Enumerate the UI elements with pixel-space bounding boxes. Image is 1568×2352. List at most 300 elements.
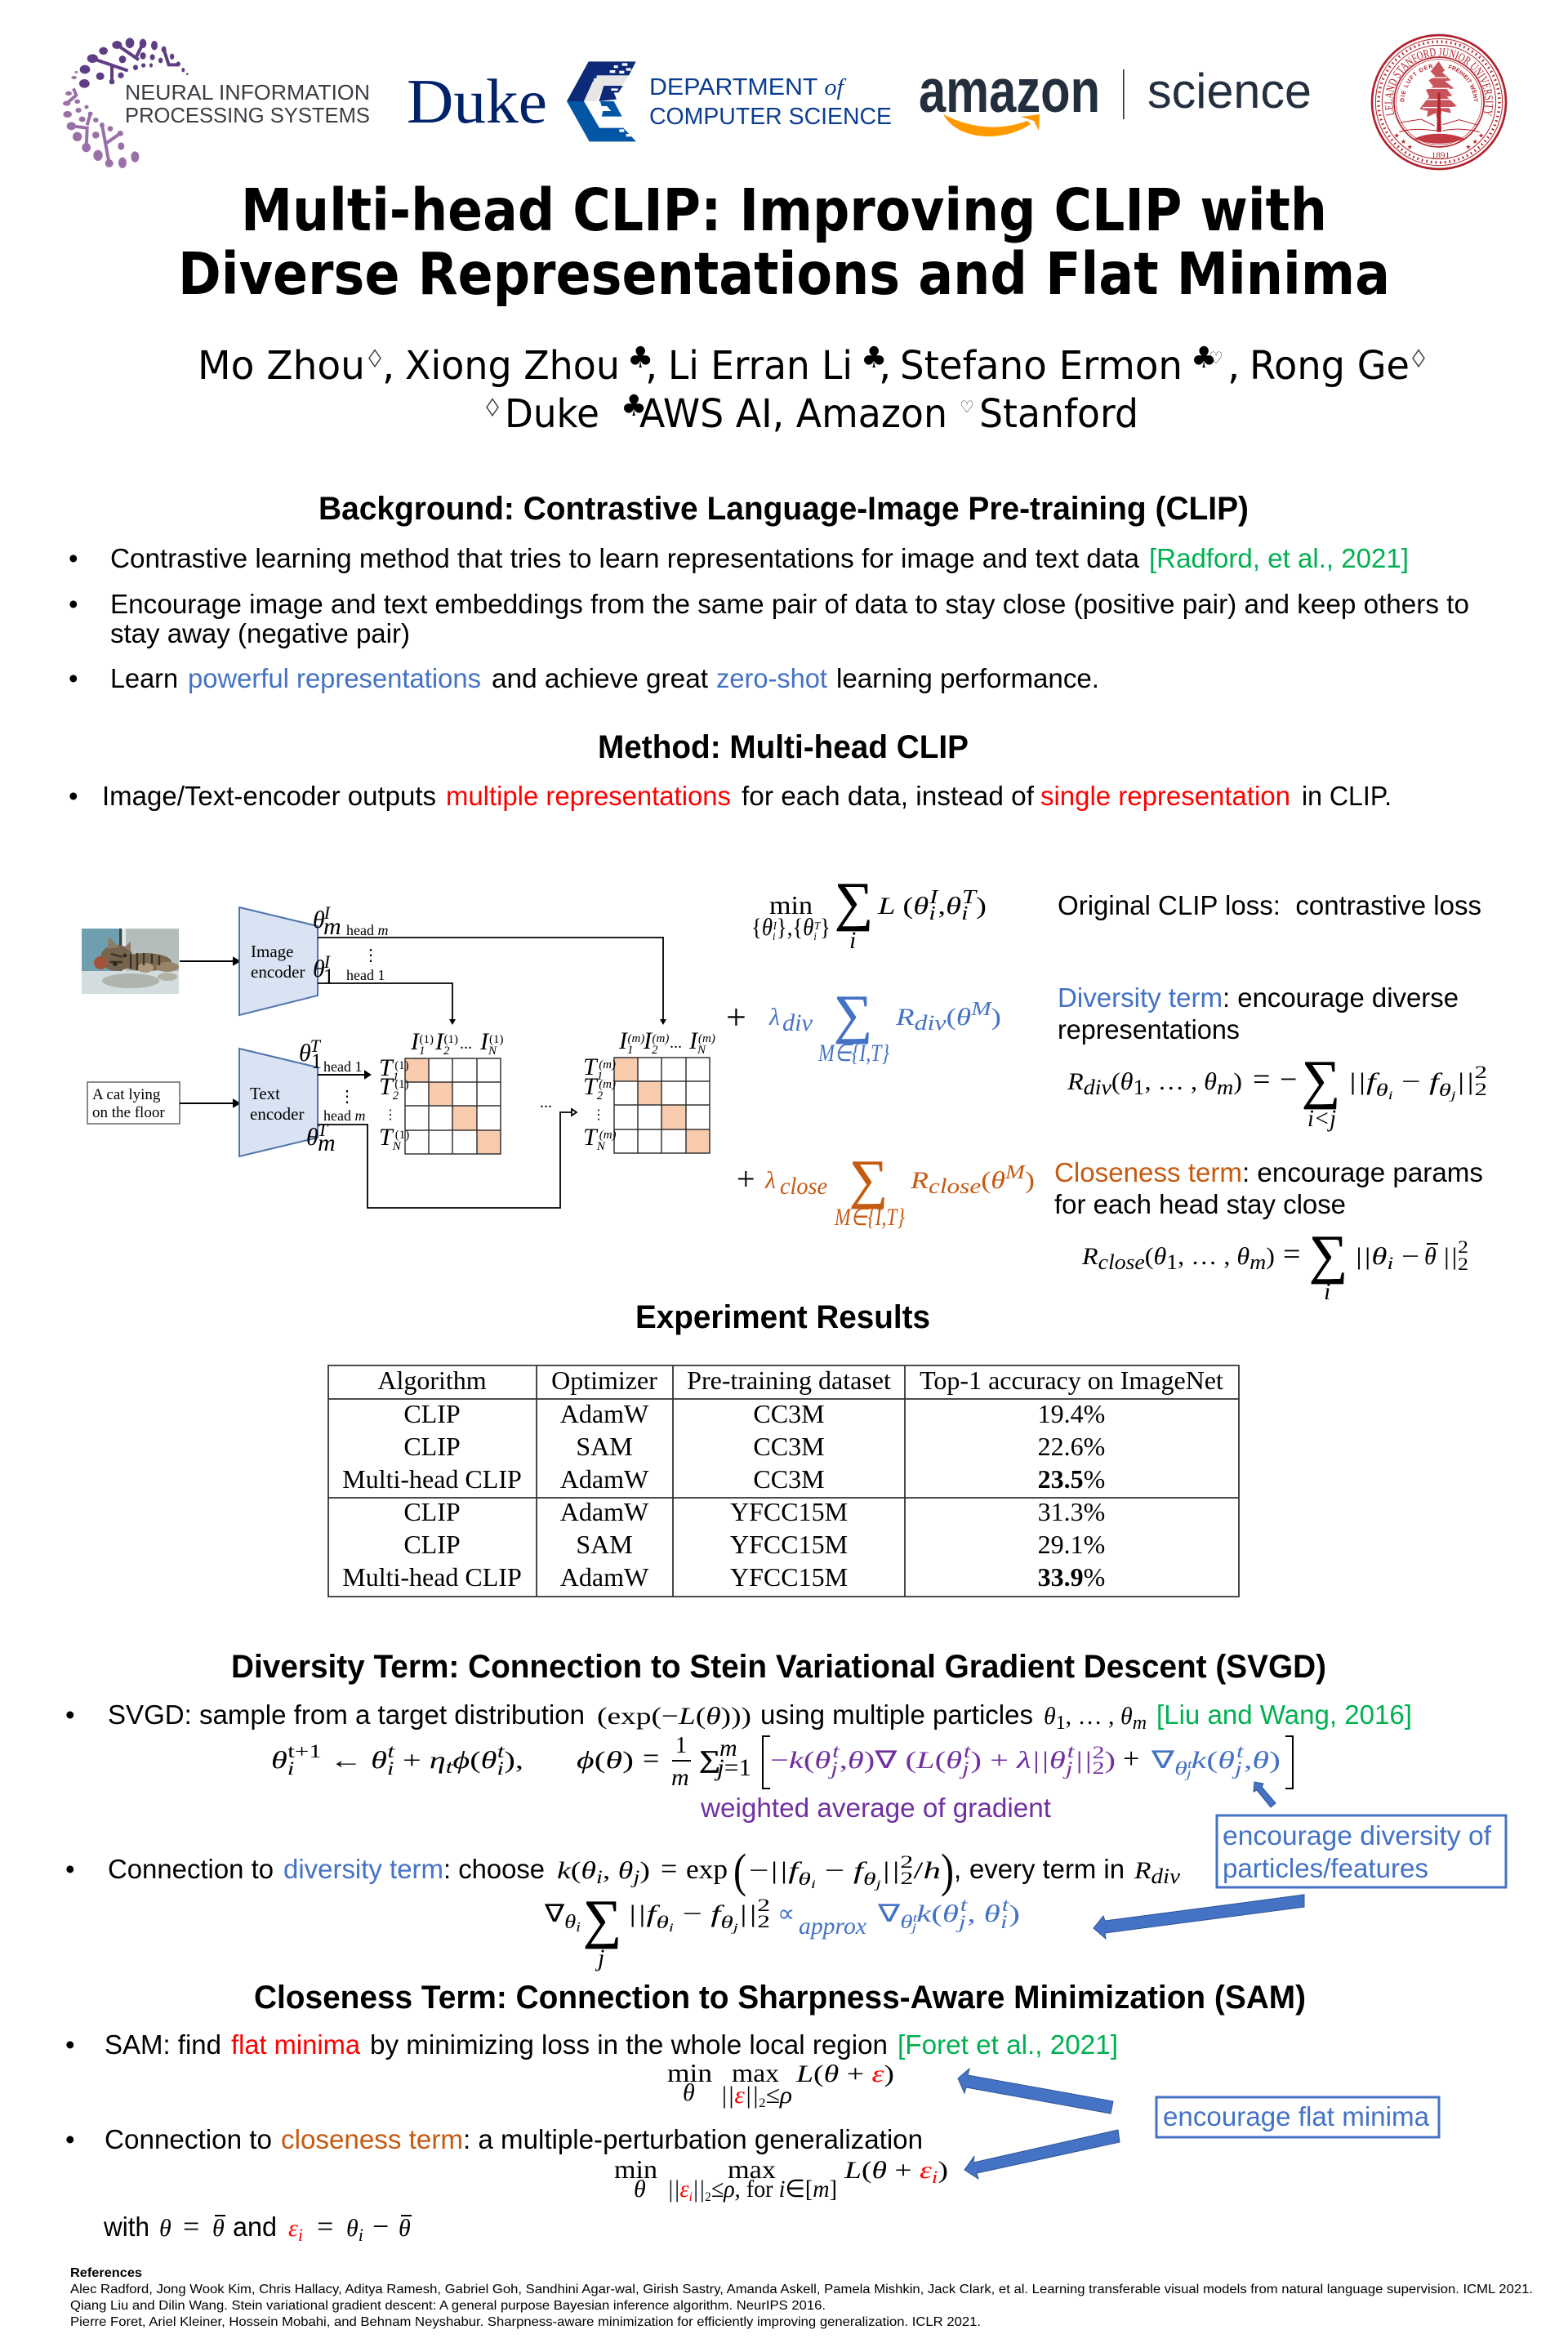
equation: SVGD update: ϕ(θ) [577,1747,634,1774]
equation: diversity regulariser: M [970,999,993,1020]
table: experiment results: CLIP [403,1432,461,1461]
equation: R_div: 1 [1134,1076,1145,1099]
equation: closeness regulariser: θ [991,1167,1003,1194]
equation: SVGD update: ), [505,1747,523,1774]
equation: SVGD update: θ [271,1747,283,1774]
logo: Stanford seal: FREIHEIT WEHT [1449,65,1478,101]
matrix: head 1 similarity: ⋮ [384,1108,397,1122]
labels: image heads: θ [313,956,325,982]
labels: text heads: T [318,1120,329,1140]
logo: Stanford seal: DIE LUFT DER [1400,64,1433,101]
equation: multi-perturbation objective: ) [938,2157,948,2184]
matrix: head m similarity [583,1027,715,1153]
equation: CLIP loss: , [938,893,946,920]
logo: Stanford seal: 1891 [1432,151,1450,160]
equation: gradient proportionality: i [1000,1912,1008,1932]
arrow: diversity callout to kernel term [1254,1782,1276,1807]
labels: image heads: θ [313,906,325,933]
equation: CLIP loss: θ [803,914,815,941]
text: connection to closeness [65,2124,923,2154]
authors: Stanford [979,391,1138,437]
text: with definitions: i [359,2225,363,2245]
equation: closeness regulariser [737,1150,1035,1231]
text: connection to diversity: • [65,1854,75,1884]
arrow: diversity callout to equation [1094,1895,1304,1939]
arrow: flat minima to SAM objective [958,2069,1113,2114]
callout: encourage diversity: encourage diversity of [1223,1820,1492,1851]
text: connection to diversity: , [954,1854,961,1884]
equation: R_close: , … , [1178,1243,1236,1270]
equation: diversity regulariser [726,985,1001,1067]
table: experiment results: SAM [576,1432,633,1461]
table: experiment results: YFCC15M [730,1562,848,1592]
authors: ♣ [1191,341,1217,375]
equation: R_div: , … , [1145,1068,1204,1095]
equation: CLIP loss: i [849,927,856,954]
matrix: head m similarity: 1 [597,1070,603,1083]
equation: R_div: θ [1204,1068,1216,1095]
equation: R_div: − [1280,1062,1297,1097]
matrix: head m similarity: (m) [599,1129,617,1142]
equation: SVGD update: t [1236,1741,1245,1762]
labels: text heads: ⋮ [339,1088,355,1106]
matrix: head 1 similarity: T [379,1054,393,1081]
panel: caption box [87,1082,180,1124]
authors: , [879,343,891,389]
equation: CLIP loss: } [820,914,831,941]
equation: R_div: R [1067,1068,1082,1095]
logo: NeurIPS: PROCESSING SYSTEMS [125,103,370,127]
matrix: head 1 similarity: (1) [394,1078,409,1091]
equation: SVGD update: i [287,1758,294,1779]
authors: ♣ [621,390,647,423]
equation: diversity regulariser: M∈{I,T} [817,1040,889,1067]
equation: CLIP loss: ) [976,893,987,920]
panel: caption box: on the floor [92,1104,165,1121]
text: connection to diversity: k(θ [557,1857,593,1884]
text: connection to diversity: exp [686,1855,728,1885]
equation: SVGD update: m [671,1764,689,1791]
text: SVGD bullet: SVGD: sample from a target distribution [108,1699,585,1730]
authors: Li Erran Li [668,343,853,389]
text: connection to diversity: h [923,1857,935,1884]
equation: R_div: ( [1111,1068,1120,1095]
text: connection to diversity: θ [863,1869,876,1889]
equation: gradient proportionality [544,1890,1020,1971]
text: SVGD bullet: θ [1120,1703,1133,1730]
equation: diversity regulariser: ) [991,1004,1001,1031]
table: experiment results: CLIP [403,1399,461,1428]
equation: gradient proportionality: ∝ [777,1900,795,1927]
labels: text heads: 1 [311,1049,322,1073]
text: SVGD bullet: θ [1044,1703,1056,1730]
equation: CLIP loss: i [961,903,969,924]
text: SAM bullet: flat minima [231,2029,361,2060]
panel: background bullets: and achieve great [492,663,708,693]
equation: multi-perturbation objective: ≤ρ, [711,2176,741,2203]
logo: Stanford seal: ★ [1472,138,1478,145]
text: connection to diversity: −||f [749,1857,789,1884]
labels: image heads: head 1 [346,967,385,983]
logo: Department of Computer Science [567,61,892,141]
text: connection to diversity: / [913,1857,924,1884]
equation: gradient proportionality: i [576,1919,581,1935]
matrix: head m similarity: T [583,1124,597,1151]
equation: multi-perturbation objective: min [614,2154,657,2184]
equation: multi-perturbation objective: i [689,2190,693,2204]
matrix: head 1 similarity: (1) [420,1033,434,1046]
title: Diverse Representations and Flat Minima [178,240,1390,308]
text: with definitions: i [298,2225,303,2245]
table: experiment results: 33.9% [1038,1562,1105,1592]
references: Qiang Liu and Dilin Wang. Stein variational gradient descent: A general purpose Bayesian inference algorithm. NeurIPS 2016. [70,2299,826,2313]
table: experiment results: 29.1% [1038,1530,1105,1559]
equation: SVGD update [271,1733,1293,1791]
callout: encourage diversity [1217,1815,1506,1887]
equation: SVGD update: t [497,1741,505,1762]
authors: , [382,343,394,389]
matrix: head 1 similarity: N [392,1140,402,1153]
equation: diversity regulariser: div [782,1009,813,1036]
table: experiment results: AdamW [560,1562,649,1592]
equation: SAM objective [667,2058,894,2110]
equation: diversity regulariser: ( [947,1004,956,1031]
text: connection to diversity: ) [639,1857,650,1884]
matrix: head 1 similarity: (1) [444,1033,458,1046]
equation: R_close: ||θ [1354,1243,1379,1270]
panel: image encoder [239,907,318,1015]
arrow: flat minima to multi-perturbation objective [964,2130,1120,2179]
arrow: head 1 to matrix 1 row [318,1071,370,1078]
labels: text heads [299,1036,365,1156]
equation: multi-perturbation objective: max [728,2154,776,2184]
equation: R_close: i [1324,1278,1330,1305]
equation: R_close [1081,1225,1468,1305]
text: connection to closeness: Connection to [105,2124,272,2154]
panel: background bullets: [Radford, et al., 2021] [1149,543,1409,573]
text: connection to diversity: ) [941,1844,954,1897]
equation: R_close: θ [1153,1243,1165,1270]
equation: SVGD update: −k(θ [770,1747,826,1774]
logo: Stanford seal: ★ [1478,131,1484,139]
equation: gradient proportionality: j [910,1922,916,1935]
arrow: head m to matrix m row [318,1109,577,1208]
text: method bullet: in CLIP. [1302,781,1392,811]
matrix: head m similarity: 1 [627,1044,634,1057]
table: experiment results: 19.4% [1038,1399,1105,1428]
logo: Amazon Science [919,56,1312,136]
equation: CLIP loss: L (θ [878,893,925,920]
matrix: head m similarity: I [619,1027,627,1054]
authors: , [1227,343,1240,389]
title: Multi-head CLIP: Improving CLIP with [241,176,1327,244]
equation: CLIP loss: T [962,887,978,908]
heading: Closeness Term: Closeness Term: Connection to Sharpness-Aware Minimization (SAM) [254,1980,1306,2016]
authors: Xiong Zhou [405,343,620,389]
matrix: head 1 similarity [379,1028,504,1154]
logo: Stanford seal [1370,34,1508,170]
labels: text heads: head m [323,1107,365,1124]
equation: R_close: R [1082,1243,1097,1270]
equation: R_div: f [1429,1068,1436,1095]
text: SVGD bullet: [Liu and Wang, 2016] [1156,1699,1412,1730]
equation: R_close: close [1098,1250,1145,1274]
logo: Duke: Duke [407,66,547,136]
text: SAM bullet: • [65,2029,75,2060]
equation: SVGD update: t [964,1741,971,1762]
panel: caption box: A cat lying [92,1086,161,1103]
text: connection to diversity: div [1151,1864,1181,1888]
equation: R_close: 2 [1458,1236,1468,1257]
text: SAM bullet: SAM: find [105,2029,221,2060]
matrix: head 1 similarity: I [480,1028,488,1055]
labels: image heads: I [323,951,332,972]
equation: R_div: ) [1233,1068,1242,1095]
labels: text heads: T [310,1036,322,1056]
equation: R_div [1067,1050,1487,1132]
equation: SVGD update: j=1 [714,1754,751,1781]
labels: text heads: head 1 [323,1058,362,1075]
table: experiment results: Optimizer [551,1365,657,1395]
equation: closeness regulariser: M [1004,1162,1027,1183]
equation: SVGD update: i [387,1758,394,1779]
table: experiment results: Multi-head CLIP [342,1464,522,1494]
equation: diversity regulariser: λ [768,1004,780,1031]
equation: multi-perturbation objective: 2 [705,2190,711,2204]
heading: Background: Background: Contrastive Language-Image Pre-training (CLIP) [318,491,1249,527]
table: experiment results: Top-1 accuracy on ImageNet [920,1365,1223,1395]
equation: R_div: || [1456,1068,1475,1095]
labels: image heads: m [323,913,341,940]
equation: SVGD update: || [1074,1747,1093,1774]
equation: closeness regulariser: close [929,1174,981,1198]
equation: closeness regulariser: R [911,1167,925,1194]
equation: CLIP loss: i [929,903,936,924]
equation: gradient proportionality: 2 [757,1911,770,1931]
logo: NeurIPS: NEURAL INFORMATION [125,80,370,105]
equation: CLIP loss [751,872,987,954]
equation: SVGD update: , [840,1747,848,1774]
equation: gradient proportionality: , [967,1900,984,1927]
table: experiment results: CLIP [403,1497,461,1526]
text: with definitions: θ [159,2215,172,2242]
equation: SVGD update: m [719,1735,737,1762]
text: closeness term [1054,1157,1483,1219]
panel: background bullets [69,543,1469,693]
equation: R_div: i<j [1307,1105,1336,1132]
equation: gradient proportionality: t [913,1912,918,1925]
equation: SVGD update: θ [371,1747,383,1774]
equation: SVGD update: 2 [1093,1757,1104,1778]
equation: SVGD update: j [1232,1758,1242,1779]
text: connection to diversity: θ [798,1869,811,1889]
equation: SAM objective: 2 [759,2096,766,2110]
text: method bullet: • [69,781,78,811]
matrix: head m similarity: ⋮ [592,1108,605,1122]
authors: ♡ [960,397,974,416]
panel: image encoder: encoder [251,962,305,982]
text: connection to closeness: closeness term [281,2124,463,2154]
equation: gradient proportionality: θ [900,1912,913,1932]
equation: multi-perturbation objective: i [932,2167,938,2187]
authors: ◊ [1412,348,1425,368]
text: connection to diversity: − [816,1857,853,1884]
table: experiment results: CLIP [403,1530,461,1559]
equation: SAM objective: ≤ρ [766,2082,792,2109]
heading: Diversity Term: Diversity Term: Connection to Stein Variational Gradient Descent (SVGD) [231,1649,1326,1685]
text: SVGD bullet: m [1133,1713,1147,1734]
authors: ♣ [861,341,887,375]
equation: R_close: i [1387,1253,1393,1273]
equation: R_div: θ [1439,1080,1451,1100]
text: SVGD bullet: , … , [1066,1703,1120,1730]
equation: closeness regulariser: close [780,1173,827,1200]
text: connection to diversity: , [603,1857,618,1884]
arrow: head m to matrix m [318,938,663,1021]
equation: R_div: ||f [1348,1068,1368,1095]
matrix: head m similarity: 2 [652,1044,658,1057]
labels: image heads: head m [346,922,388,938]
equation: SVGD update: λ||θ [1017,1747,1053,1774]
matrix: head m similarity: 2 [597,1089,604,1102]
text: SVGD bullet: (exp(− L(θ))) [597,1703,751,1730]
panel: text encoder [239,1049,318,1156]
equation: SVGD update: ϕ [452,1747,470,1774]
logo: Stanford seal: ★ [1401,138,1406,145]
equation: SVGD update: (θ [1206,1747,1230,1774]
text: closeness term: : encourage params [1242,1157,1483,1187]
matrix: head m similarity: (m) [599,1078,616,1091]
panel: text encoder: Text [250,1084,280,1103]
text: with definitions: θ [212,2215,225,2242]
equation: SVGD update: t [446,1757,453,1777]
icon: cat photo [82,929,179,994]
equation: SVGD update: i [497,1758,504,1779]
matrix: head 1 similarity: I [435,1028,443,1055]
panel: background bullets: • [69,543,78,573]
equation: SVGD update: t [1187,1758,1193,1771]
equation: R_close: = [1283,1237,1300,1272]
equation: SVGD update: ) [1104,1747,1116,1774]
heading: Method: Method: Multi-head CLIP [598,729,969,765]
text: SVGD bullet [65,1699,1412,1734]
matrix: head 1 similarity: (1) [394,1059,409,1072]
labels: image heads [313,902,388,988]
text: SVGD bullet: 1 [1056,1713,1066,1734]
equation: R_close: θ [1424,1243,1437,1270]
panel: background bullets: Encourage image and text embeddings from the same pair of data to stay close (positive pair) and keep others to [110,589,1469,619]
text: SAM bullet: [Foret et al., 2021] [898,2029,1118,2060]
panel: background bullets: powerful representations [188,663,481,693]
diagram: multi-head CLIP architecture [82,902,715,1208]
equation: SVGD update: 2 [1093,1742,1104,1762]
equation: gradient proportionality: ∇ [877,1900,902,1927]
matrix: head 1 similarity: I [411,1028,419,1055]
matrix: head m similarity: (m) [652,1032,669,1045]
text: SAM bullet [65,2029,1118,2060]
panel: background bullets: Contrastive learning method that tries to learn representations for image and text data [110,543,1140,573]
equation: gradient proportionality: i [669,1922,674,1935]
equation: diversity regulariser: θ [956,1004,969,1031]
matrix: head m similarity: I [689,1027,697,1054]
text: connection to diversity: : choose [443,1854,545,1884]
text: connection to diversity: i [596,1867,603,1887]
equation: SVGD update: + [1123,1742,1139,1775]
table: experiment results: 31.3% [1038,1497,1105,1526]
equation: CLIP loss: min [769,890,813,920]
equation: gradient proportionality: ∇ [544,1900,565,1927]
equation: R_close: ∑ [1309,1225,1348,1285]
panel: background bullets: stay away (negative pair) [110,618,410,648]
text: diversity term: Diversity term [1058,982,1223,1013]
text: connection to diversity: θ [618,1857,630,1884]
equation: CLIP loss: ∑ [835,872,873,932]
equation: gradient proportionality: t [1002,1895,1009,1915]
text: closeness term: Closeness term [1054,1157,1242,1187]
text: weighted average label: weighted average of gradient [700,1793,1051,1823]
text: with definitions: θ [346,2215,359,2242]
equation: R_div: θ [1120,1068,1132,1095]
equation: CLIP loss: },{ [777,914,803,941]
equation: diversity regulariser: R [896,1004,911,1031]
equation: diversity regulariser: ∑ [834,985,872,1045]
arrow: head 1 to matrix 1 [318,983,452,1021]
matrix: head m similarity: (m) [698,1032,715,1045]
logo: Stanford seal: LELAND STANFORD JUNIOR UNIVERSITY [1385,47,1493,117]
equation: gradient proportionality: θ [720,1912,733,1932]
text: ellipsis between matrices: ... [540,1094,552,1111]
table: experiment results [328,1365,1239,1597]
text: with definitions: and [233,2212,277,2242]
matrix: head 1 similarity: N [488,1045,497,1058]
authors: ◊ [368,348,381,368]
text: with definitions: = [183,2210,199,2243]
heading: Experiment Results: Experiment Results [635,1299,930,1335]
equation: R_div: θ [1376,1080,1388,1100]
text: connection to diversity: j [874,1878,881,1891]
equation: R_div: ∑ [1302,1050,1340,1110]
text: connection to diversity: 2 [900,1851,913,1872]
table: experiment results: 22.6% [1038,1432,1105,1461]
text: SAM bullet: by minimizing loss in the whole local region [370,2029,888,2060]
equation: gradient proportionality: approx [799,1913,867,1940]
equation: R_div: − [1393,1068,1429,1095]
title [178,176,1390,308]
equation: closeness regulariser: λ [764,1167,776,1194]
table: experiment results: Multi-head CLIP [342,1562,522,1592]
matrix: head m similarity: (m) [627,1032,644,1045]
logo: Stanford seal: ★ [1407,144,1413,151]
text: diversity term: representations [1058,1014,1240,1045]
equation: R_close: || [1442,1243,1455,1270]
equation: gradient proportionality: − [674,1900,710,1927]
table: experiment results: YFCC15M [730,1497,848,1526]
text: connection to diversity: i [811,1878,816,1891]
equation: SVGD update: ) + [971,1747,1017,1774]
matrix: head 1 similarity: 2 [443,1045,450,1058]
equation: gradient proportionality: (θ [931,1900,955,1927]
matrix: head 1 similarity: 1 [393,1071,399,1084]
matrix: head m similarity: I [644,1027,652,1054]
equation: SVGD update: t [1067,1741,1075,1762]
text: with definitions: θ [399,2215,411,2242]
panel: background bullets: zero-shot [716,663,827,693]
equation: gradient proportionality: f [710,1900,718,1927]
authors [198,341,1425,437]
text: connection to diversity [65,1844,1181,1897]
equation: diversity regulariser: + [726,997,746,1037]
text: with definitions: with [103,2212,149,2242]
